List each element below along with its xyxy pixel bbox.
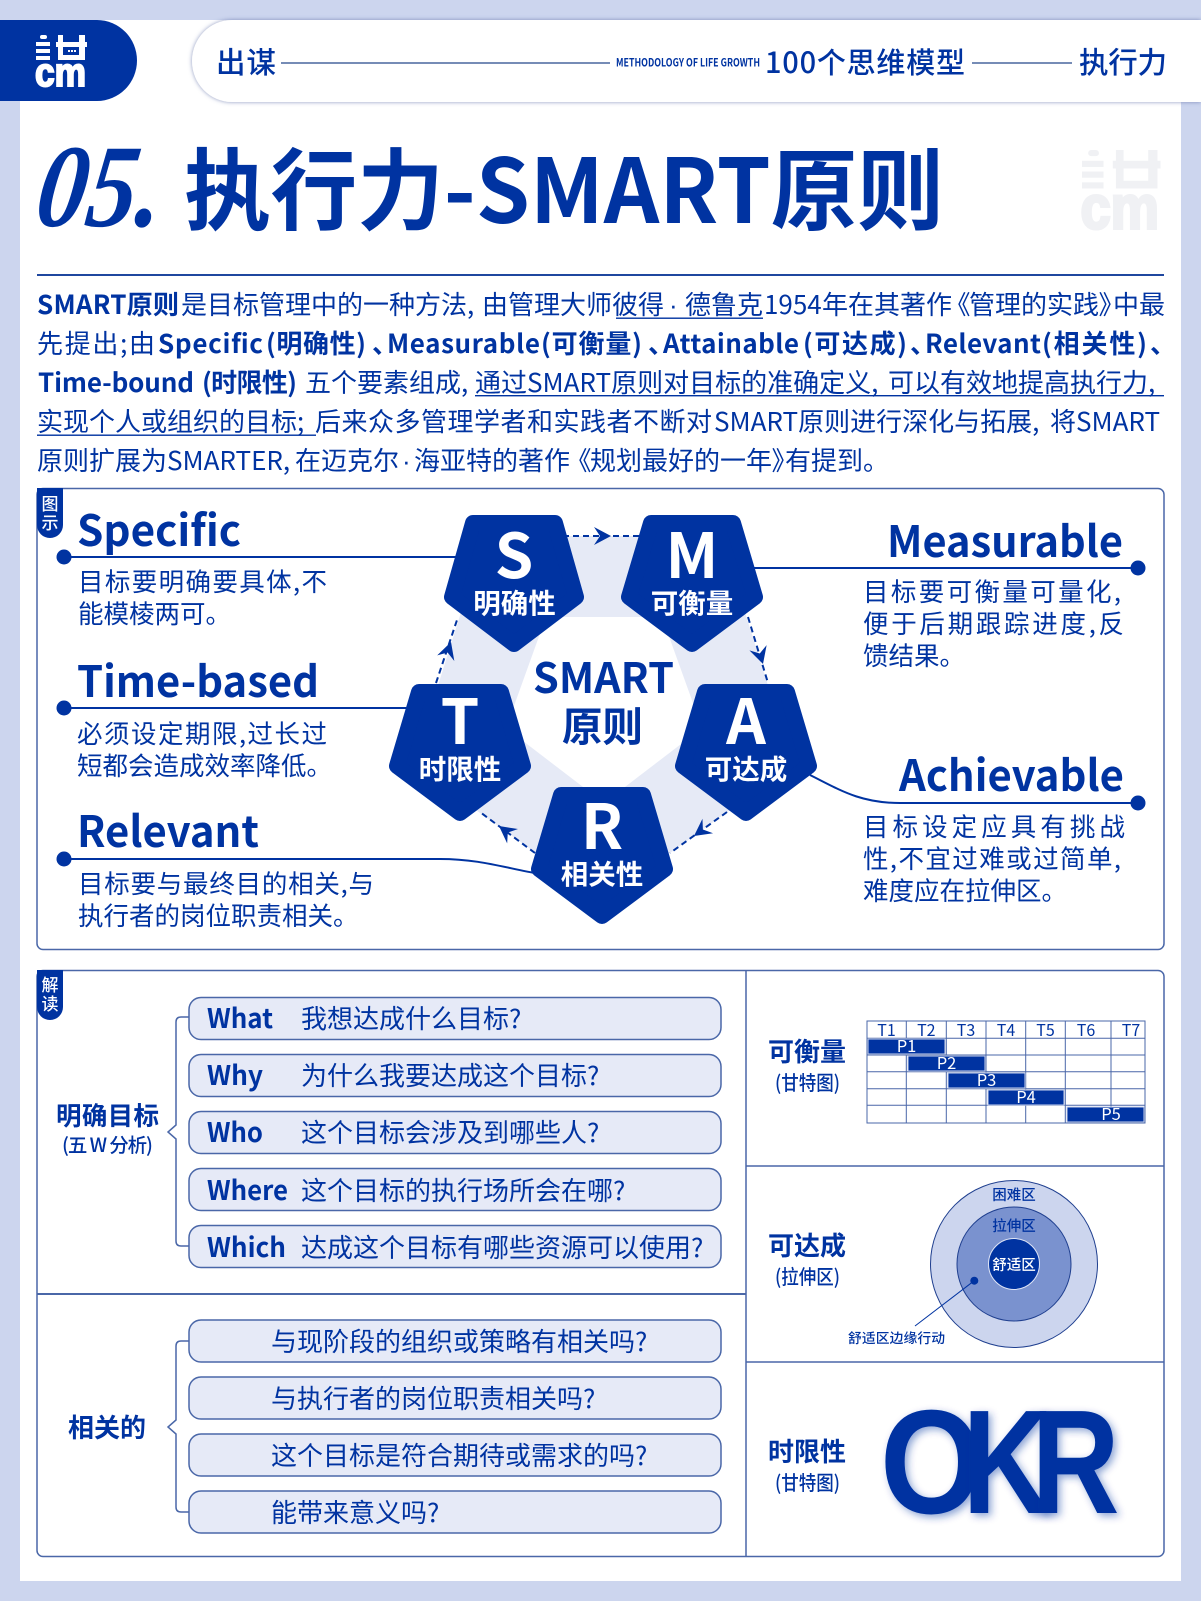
intro paragraph: 》 xyxy=(1098,285,1112,322)
tab: 解读: 读 xyxy=(42,990,58,1015)
logo badge xyxy=(0,20,137,101)
row: Where: Where xyxy=(207,1169,288,1208)
row: Why: 为什么我要达成这个目标? xyxy=(301,1056,599,1093)
row: relevance 1: 与现阶段的组织或策略有相关吗? xyxy=(271,1322,647,1359)
arrow A to R xyxy=(670,812,727,853)
pentagon M xyxy=(629,506,755,644)
bar P4 xyxy=(988,1084,1064,1108)
row: Who: Who xyxy=(207,1111,263,1150)
pentagon T: T xyxy=(441,672,479,762)
label: Achievable: 性,不宜过难或过简单, xyxy=(863,839,1121,876)
intro paragraph: Time-bound xyxy=(38,363,194,400)
header series title: 100个思维模型 xyxy=(765,40,965,82)
label: Specific: 能模棱两可。 xyxy=(78,594,231,631)
bar P2: P2 xyxy=(937,1050,956,1074)
bar P2 xyxy=(908,1050,985,1074)
comfort zone circles: 拉伸区 xyxy=(992,1215,1036,1236)
pointer xyxy=(915,1277,978,1326)
heading: 时限性: (甘特图) xyxy=(775,1467,840,1496)
pentagon R xyxy=(539,777,665,916)
row: Who: 这个目标会涉及到哪些人? xyxy=(301,1113,599,1150)
header pill xyxy=(192,20,1201,102)
intro paragraph: 先提出;由 xyxy=(37,324,155,361)
header bar xyxy=(192,20,1201,102)
label: Relevant: Relevant xyxy=(77,798,259,860)
intro paragraph: SMART原则 xyxy=(37,285,179,322)
intro paragraph: 是目标管理中的一种方法, xyxy=(181,285,474,322)
intro paragraph: SMART原则进行深化与拓展, xyxy=(714,402,1039,439)
intro paragraph: 管理的实践 xyxy=(969,285,1099,322)
label: Achievable: 难度应在拉伸区。 xyxy=(863,871,1067,908)
gantt chart: T7 xyxy=(1122,1017,1140,1041)
row: relevance 2: 与执行者的岗位职责相关吗? xyxy=(271,1379,595,1416)
bracket: five W xyxy=(168,1017,189,1246)
intro paragraph: 德鲁克 xyxy=(685,285,763,322)
header rule right xyxy=(972,62,1072,64)
OKR wordmark: R xyxy=(1032,1380,1120,1545)
intro paragraph: 将SMART xyxy=(1050,402,1160,439)
heading: 明确目标: (五 W 分析) xyxy=(62,1129,153,1158)
intro paragraph: 原则扩展为SMARTER, xyxy=(37,441,290,478)
intro paragraph: 在迈克尔 xyxy=(295,441,399,478)
intro paragraph: (相关性) xyxy=(1042,324,1147,361)
centre title xyxy=(533,645,674,753)
title: 执行力-SMART原则 xyxy=(184,120,944,249)
row: Where: 这个目标的执行场所会在哪? xyxy=(301,1171,625,1208)
label: Time-based: 短都会造成效率降低。 xyxy=(77,746,332,783)
comfort zone circles xyxy=(848,1180,1098,1348)
pentagon R: 相关性 xyxy=(561,852,643,892)
pentagon ring background xyxy=(413,536,793,901)
header category: 执行力 xyxy=(1079,40,1167,82)
arrow R to T xyxy=(480,812,535,853)
intro paragraph: (可达成) xyxy=(803,324,907,361)
tab: 图示: 图 xyxy=(42,490,58,515)
intro paragraph: 、 xyxy=(372,324,398,361)
row: relevance 3: 这个目标是符合期待或需求的吗? xyxy=(271,1436,647,1473)
header label: 出谋: 出谋 xyxy=(216,40,276,82)
intro paragraph: 五个要素组成, xyxy=(305,363,468,400)
label: Measurable: 馈结果。 xyxy=(863,636,965,673)
connector: Measurable xyxy=(750,560,1146,576)
row: relevance 2 xyxy=(189,1377,721,1419)
row: Who xyxy=(189,1111,721,1154)
watermark letters: cm xyxy=(1080,174,1159,243)
header rule left xyxy=(281,62,610,64)
label: Measurable: 便于后期跟踪进度,反 xyxy=(863,604,1124,641)
arrow S to M xyxy=(563,527,640,545)
row: relevance 1 xyxy=(189,1320,721,1362)
bar P1 xyxy=(868,1033,945,1057)
label: Measurable xyxy=(863,508,1124,673)
heading: 时限性: 时限性 xyxy=(768,1432,846,1469)
centre title: SMART xyxy=(533,645,674,706)
connector: Achievable xyxy=(810,775,1146,810)
pentagon R: R xyxy=(581,777,623,867)
comfort zone circles: 舒适区 xyxy=(992,1254,1036,1275)
connector: Time-based xyxy=(56,700,415,716)
heading: 明确目标: 明确目标 xyxy=(56,1096,159,1133)
row: What: What xyxy=(207,997,273,1036)
heading: 可达成: (拉伸区) xyxy=(775,1261,840,1290)
pentagon T xyxy=(397,672,523,813)
tab: 图示: 示 xyxy=(42,509,58,534)
row: Why: Why xyxy=(207,1054,263,1093)
OKR wordmark: K xyxy=(962,1380,1050,1545)
row: Which: 达成这个目标有哪些资源可以使用? xyxy=(301,1228,703,1265)
gantt chart xyxy=(867,1017,1145,1125)
pentagon S xyxy=(452,506,576,644)
OKR wordmark xyxy=(880,1380,1120,1545)
heading: 明确目标 xyxy=(56,1096,159,1158)
heading: 可衡量 xyxy=(768,1032,846,1096)
arrow M to A xyxy=(748,617,772,683)
heading: 可达成: 可达成 xyxy=(768,1226,846,1263)
row: What xyxy=(189,997,721,1040)
intro paragraph: (时限性) xyxy=(202,363,297,400)
intro paragraph: 海亚特的著作 xyxy=(414,441,570,478)
label: Time-based: 必须设定期限,过长过 xyxy=(77,714,327,751)
centre title: 原则 xyxy=(562,694,643,753)
bracket: relevance xyxy=(168,1341,189,1512)
tab: 图示 xyxy=(37,488,63,538)
row: relevance 3 xyxy=(189,1434,721,1476)
intro paragraph xyxy=(37,285,1176,478)
pentagon T: 时限性 xyxy=(419,747,501,787)
label: Achievable: Achievable xyxy=(898,742,1124,804)
panel: interpretation xyxy=(37,970,1164,1557)
OKR wordmark: O xyxy=(880,1380,983,1545)
label: Relevant: 目标要与最终目的相关,与 xyxy=(78,864,374,901)
intro paragraph: 可以有效地提高执行力, xyxy=(888,363,1155,400)
connector: Specific xyxy=(56,550,460,564)
intro paragraph: 、 xyxy=(648,324,674,361)
intro paragraph: 《 xyxy=(957,285,971,322)
label: Measurable: Measurable xyxy=(887,508,1123,570)
header english tagline: METHODOLOGY OF LIFE GROWTH xyxy=(616,54,760,70)
heading: 可衡量: (甘特图) xyxy=(775,1067,840,1096)
label: Time-based xyxy=(77,648,332,783)
centre white pentagon xyxy=(506,617,702,803)
pentagon S: 明确性 xyxy=(473,581,556,621)
intro paragraph: (明确性) xyxy=(266,324,366,361)
comfort zone circles: 困难区 xyxy=(992,1184,1036,1205)
intro paragraph: 、 xyxy=(1150,324,1176,361)
bar P4: P4 xyxy=(1016,1084,1036,1108)
label: Relevant: 执行者的岗位职责相关。 xyxy=(78,896,359,933)
intro paragraph: Measurable xyxy=(387,324,540,361)
heading: 相关的: 相关的 xyxy=(68,1408,146,1445)
label: Achievable: 目标设定应具有挑战 xyxy=(863,807,1125,844)
row: Which: Which xyxy=(207,1226,286,1265)
panel: SMART diagram xyxy=(37,488,1164,950)
title number: 05. xyxy=(29,121,173,252)
pentagon A xyxy=(683,672,809,813)
label: Specific: Specific xyxy=(77,497,241,559)
gantt chart: T2 xyxy=(917,1017,936,1041)
gantt chart: T3 xyxy=(957,1017,975,1041)
row: relevance 4: 能带来意义吗? xyxy=(271,1493,439,1530)
logo letters: cm xyxy=(35,51,86,95)
intro paragraph: · xyxy=(669,290,678,320)
intro rule xyxy=(37,274,1164,276)
label: Relevant xyxy=(77,798,374,933)
intro paragraph: Attainable xyxy=(662,324,799,361)
watermark logo xyxy=(1080,150,1161,243)
intro paragraph: 1954 xyxy=(764,285,822,322)
arrow T to S xyxy=(436,617,460,683)
intro paragraph: 年在其著作 xyxy=(822,285,952,322)
heading: 可衡量: 可衡量 xyxy=(768,1032,846,1069)
pentagon A: 可达成 xyxy=(705,747,787,787)
row: What: 我想达成什么目标? xyxy=(301,999,521,1036)
gantt chart: T4 xyxy=(997,1017,1015,1041)
intro paragraph: 《 xyxy=(578,441,592,478)
intro paragraph: 》 xyxy=(771,441,785,478)
row: Which xyxy=(189,1226,721,1268)
intro paragraph: 由管理大师彼得 xyxy=(482,285,664,322)
intro paragraph: Relevant xyxy=(925,324,1041,361)
gantt chart: T5 xyxy=(1036,1017,1055,1041)
label: Specific xyxy=(77,497,327,631)
pentagon M: M xyxy=(666,506,718,596)
row: Why xyxy=(189,1054,721,1096)
pentagon S: S xyxy=(495,506,533,596)
tab: 解读 xyxy=(37,970,63,1020)
connector: Relevant xyxy=(56,852,540,874)
intro paragraph: 通过SMART原则对目标的准确定义, xyxy=(475,363,878,400)
bar P5: P5 xyxy=(1101,1101,1121,1125)
intro paragraph: 有提到。 xyxy=(785,441,889,478)
bar P5 xyxy=(1067,1101,1144,1125)
row: Where xyxy=(189,1168,721,1210)
pentagon M: 可衡量 xyxy=(651,581,733,621)
label: Specific: 目标要明确要具体,不 xyxy=(78,562,327,599)
comfort zone circles: 舒适区边缘行动 xyxy=(848,1327,945,1347)
intro paragraph: (可衡量) xyxy=(541,324,642,361)
pentagon A: A xyxy=(725,672,766,762)
intro paragraph: Specific xyxy=(158,324,263,361)
bar P3 xyxy=(948,1067,1025,1091)
intro paragraph: 中最 xyxy=(1113,285,1165,322)
intro paragraph: · xyxy=(402,446,411,476)
bar P3: P3 xyxy=(977,1067,996,1091)
heading: 可达成 xyxy=(768,1226,846,1290)
intro paragraph: 、 xyxy=(910,324,936,361)
label: Achievable xyxy=(863,742,1125,908)
intro paragraph: 实现个人或组织的目标; xyxy=(37,402,304,439)
intro paragraph: 后来众多管理学者和实践者不断对 xyxy=(315,402,712,439)
label: Measurable: 目标要可衡量可量化, xyxy=(863,572,1121,609)
label: Time-based: Time-based xyxy=(77,648,319,710)
intro paragraph: 规划最好的一年 xyxy=(590,441,772,478)
gantt chart: T1 xyxy=(877,1017,896,1041)
gantt chart: T6 xyxy=(1077,1017,1095,1041)
row: relevance 4 xyxy=(189,1491,721,1533)
heading: 时限性 xyxy=(768,1432,846,1496)
tab: 解读: 解 xyxy=(42,971,58,996)
bar P1: P1 xyxy=(897,1033,916,1057)
